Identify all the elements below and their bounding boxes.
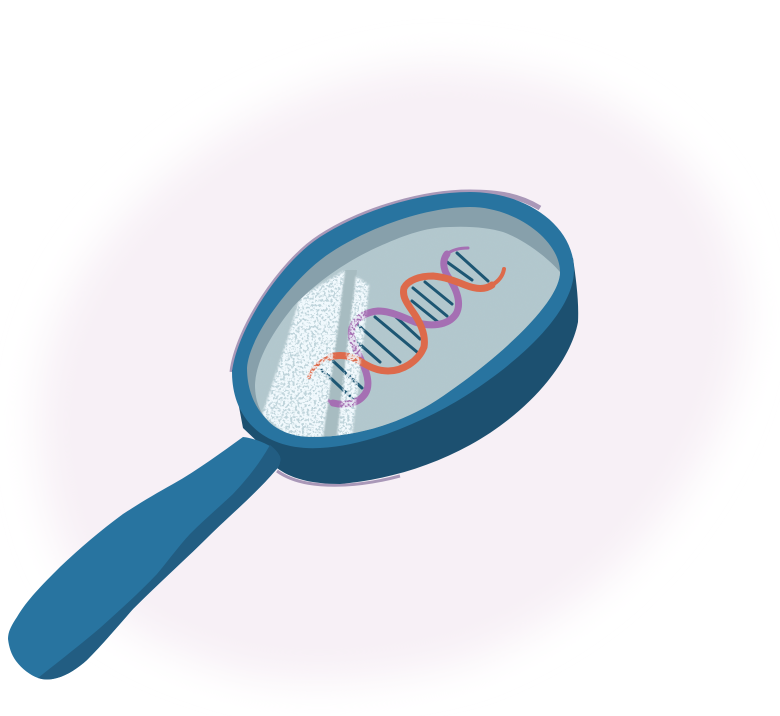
magnifying glass bbox=[8, 192, 578, 680]
inner wall bbox=[247, 207, 560, 437]
rim depth bbox=[232, 258, 578, 484]
handle bbox=[8, 437, 280, 680]
purple strand bbox=[329, 248, 468, 404]
front ring bbox=[232, 192, 574, 448]
speckle over dna bbox=[300, 300, 375, 410]
lens bbox=[255, 226, 560, 437]
orange strand bbox=[309, 269, 504, 377]
reflection bbox=[262, 270, 370, 437]
background: pale lilac blob bbox=[38, 66, 745, 681]
dna helix bbox=[309, 248, 504, 404]
rim outline sketch bbox=[232, 192, 540, 485]
rungs bbox=[322, 253, 488, 401]
gray reflection band bbox=[323, 270, 357, 440]
